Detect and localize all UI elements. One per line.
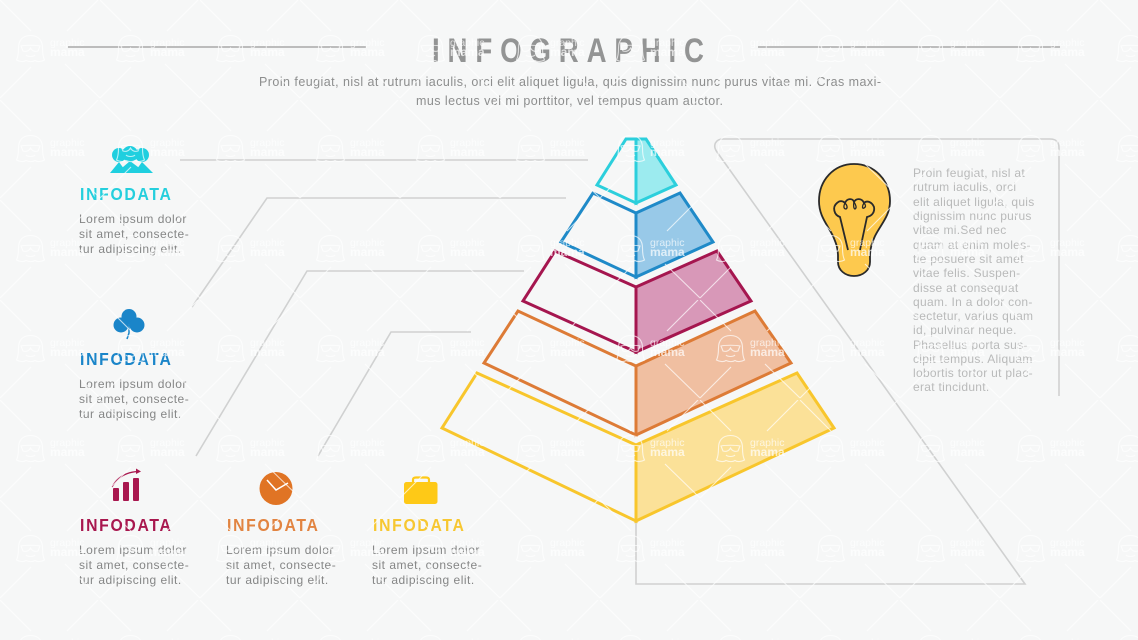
block 4: orange: sit amet, consecte- bbox=[226, 558, 336, 572]
icon: light bulb bbox=[819, 164, 890, 276]
icon: clock bbox=[260, 472, 292, 505]
subtitle: mus lectus vel mi porttitor, vel tempus quam auctor. bbox=[416, 94, 723, 108]
block 5: yellow: tur adipiscing elit. bbox=[372, 573, 475, 587]
block 3: magenta: tur adipiscing elit. bbox=[79, 573, 182, 587]
pyramid bbox=[442, 139, 834, 521]
right text block: vitae felis. Suspen- bbox=[913, 266, 1020, 280]
subtitle: Proin feugiat, nisl at rutrum iaculis, orci elit aliquet ligula, quis dignissim nunc purus vitae mi. Cras maxi- bbox=[259, 75, 881, 89]
block 3: magenta bbox=[79, 515, 189, 587]
block 2: blue: INFODATA bbox=[80, 349, 171, 369]
right text block: Proin feugiat, nisl at bbox=[913, 166, 1025, 180]
pyramid level 1: cyan bbox=[597, 139, 676, 203]
block 2: blue: Lorem ipsum dolor bbox=[79, 377, 187, 391]
block 5: yellow bbox=[372, 515, 482, 587]
block 1: cyan: sit amet, consecte- bbox=[79, 227, 189, 241]
title rule left bbox=[68, 46, 366, 48]
block 2: blue bbox=[79, 349, 189, 421]
right text block: elit aliquet ligula, quis bbox=[913, 195, 1035, 209]
block 1: cyan: Lorem ipsum dolor bbox=[79, 212, 187, 226]
pyramid level 3: magenta bbox=[523, 251, 751, 352]
pyramid level 4: orange bbox=[484, 311, 791, 435]
block 5: yellow: INFODATA bbox=[373, 515, 464, 535]
frame around right text bbox=[636, 139, 1059, 584]
right text block: dignissim nunc purus bbox=[913, 209, 1032, 223]
right text block: tie posuere sit amet bbox=[913, 252, 1024, 266]
right text block: Phasellus porta sus- bbox=[913, 338, 1028, 352]
block 2: blue: tur adipiscing elit. bbox=[79, 407, 182, 421]
connector lines bbox=[180, 160, 588, 456]
right text block: quam. In a dolor con- bbox=[913, 295, 1033, 309]
icon: clover bbox=[114, 309, 144, 339]
block 4: orange bbox=[226, 515, 336, 587]
block 5: yellow: sit amet, consecte- bbox=[372, 558, 482, 572]
block 5: yellow: Lorem ipsum dolor bbox=[372, 543, 480, 557]
subtitle bbox=[259, 75, 881, 108]
right text block: quam at enim moles- bbox=[913, 238, 1031, 252]
block 3: magenta: Lorem ipsum dolor bbox=[79, 543, 187, 557]
block 3: magenta: INFODATA bbox=[80, 515, 171, 535]
right text block: erat tincidunt. bbox=[913, 380, 990, 394]
right text block: cipit tempus. Aliquam bbox=[913, 352, 1033, 366]
right text block: disse at consequat bbox=[913, 281, 1019, 295]
block 1: cyan: tur adipiscing elit. bbox=[79, 242, 182, 256]
block 4: orange: tur adipiscing elit. bbox=[226, 573, 329, 587]
block 1: cyan bbox=[79, 184, 189, 256]
right text block bbox=[913, 166, 1035, 394]
right text block: lobortis tortor ut plac- bbox=[913, 366, 1033, 380]
right text block: id, pulvinar neque. bbox=[913, 323, 1017, 337]
right text block: vitae mi.Sed nec bbox=[913, 223, 1007, 237]
pyramid level 2: blue bbox=[561, 193, 713, 277]
pyramid level 5: yellow bbox=[442, 373, 834, 521]
block 4: orange: INFODATA bbox=[227, 515, 318, 535]
right text block: sectetur, varius quam bbox=[913, 309, 1033, 323]
right text block: rutrum iaculis, orci bbox=[913, 180, 1016, 194]
icon: bar chart with arrow bbox=[112, 468, 141, 501]
title rule right bbox=[758, 46, 1060, 48]
block 2: blue: sit amet, consecte- bbox=[79, 392, 189, 406]
block 4: orange: Lorem ipsum dolor bbox=[226, 543, 334, 557]
icon: people bbox=[110, 146, 153, 173]
block 1: cyan: INFODATA bbox=[80, 184, 171, 204]
icon: briefcase bbox=[404, 478, 438, 504]
block 3: magenta: sit amet, consecte- bbox=[79, 558, 189, 572]
title: INFOGRAPHIC bbox=[432, 31, 704, 70]
